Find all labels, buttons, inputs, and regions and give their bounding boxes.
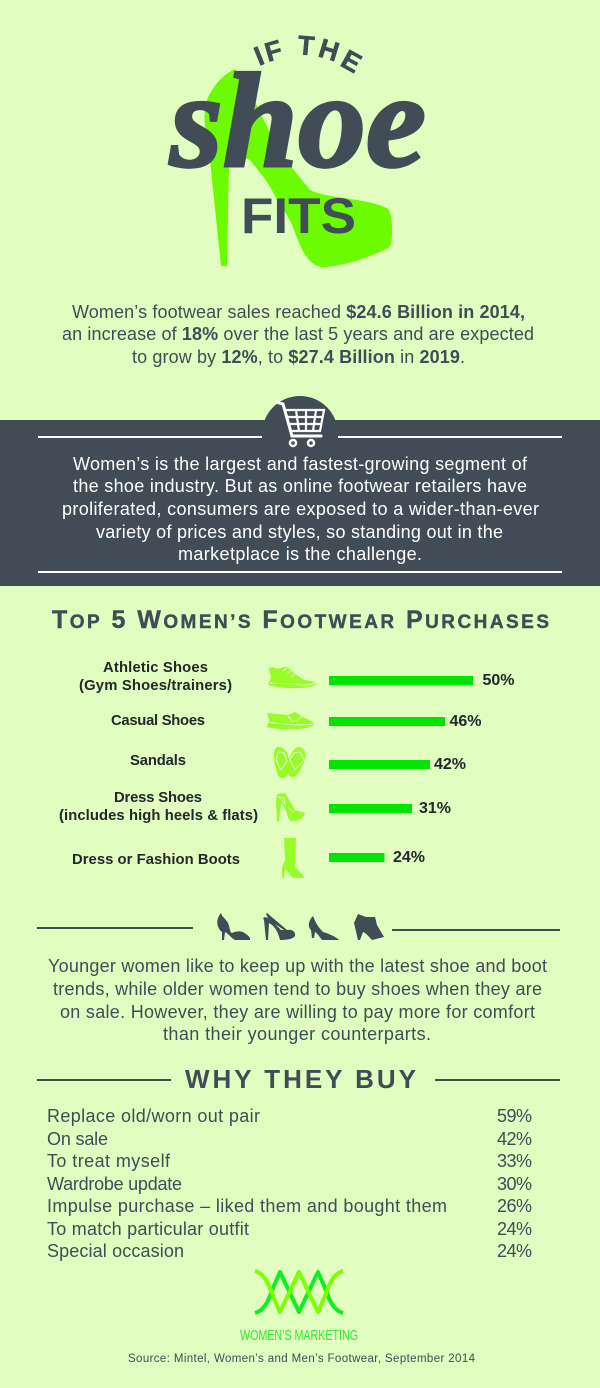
row: dress shoes: (includes high heels & flats) <box>59 808 258 824</box>
table: reasons to buy: 24% <box>497 1241 532 1261</box>
text: younger vs older women: trends, while older women tend to buy shoes when they are <box>53 979 542 999</box>
band text <box>62 454 539 564</box>
row: dress shoes: 31% <box>419 800 451 817</box>
table: reasons to buy: On sale <box>47 1129 108 1149</box>
icon: strappy high heel <box>276 793 305 821</box>
title: if the (arched): E <box>336 44 366 79</box>
intro text: an increase of 18% over the last 5 years and are expected <box>62 324 534 344</box>
text: younger vs older women: Younger women like to keep up with the latest shoe and boot <box>48 956 547 976</box>
row: athletic shoes <box>79 660 514 694</box>
icon: green high heel <box>205 69 392 267</box>
row: dress or fashion boots: Dress or Fashion Boots <box>72 852 240 868</box>
logo: women's marketing <box>240 1271 358 1344</box>
table: reasons to buy: 59% <box>497 1106 532 1126</box>
title: shoe script: shoe <box>169 47 426 196</box>
text: younger vs older women: on sale. However, they are willing to pay more for comfort <box>60 1002 535 1022</box>
table: reasons to buy: To treat myself <box>47 1151 171 1171</box>
logo: women's marketing: WOMEN’S MARKETING <box>240 1327 358 1344</box>
band text: marketplace is the challenge. <box>178 544 422 564</box>
band text: variety of prices and styles, so standing out in the <box>96 522 503 542</box>
row: casual shoes <box>111 712 482 730</box>
bar chart: top 5 purchases <box>59 660 514 878</box>
row: dress shoes <box>59 790 451 824</box>
table: reasons to buy: Wardrobe update <box>47 1174 182 1194</box>
text: younger vs older women: than their younger counterparts. <box>163 1024 431 1044</box>
icon: casual shoe <box>267 712 314 729</box>
heading: why they buy: WHY THEY BUY <box>185 1064 416 1094</box>
row: casual shoes: Casual Shoes <box>111 713 205 729</box>
icon: trainer <box>268 667 317 688</box>
table: reasons to buy: 26% <box>497 1196 532 1216</box>
title: if the (arched) <box>250 30 366 79</box>
row: dress shoes: Dress Shoes <box>114 790 202 806</box>
intro text: Women’s footwear sales reached $24.6 Billion in 2014, <box>72 302 525 322</box>
row: athletic shoes: 50% <box>482 672 514 689</box>
row: sandals: 42% <box>434 756 466 773</box>
row: athletic shoes: Athletic Shoes <box>103 660 208 676</box>
table: reasons to buy: 30% <box>497 1174 532 1194</box>
table: reasons to buy: 42% <box>497 1129 532 1149</box>
title: fits: FITS <box>241 188 356 244</box>
icon: shopping cart <box>276 402 324 446</box>
icon: flip flops <box>274 747 306 778</box>
row: sandals: Sandals <box>130 753 186 769</box>
band text: proliferated, consumers are exposed to a wider-than-ever <box>62 499 539 519</box>
source note: Source: Mintel, Women’s and Men’s Footwear, September 2014 <box>128 1353 476 1365</box>
icon row: four dark heels <box>37 913 560 940</box>
row: sandals <box>130 747 466 778</box>
table: reasons to buy: To match particular outfit <box>47 1219 249 1239</box>
table: reasons to buy: Special occasion <box>47 1241 184 1261</box>
intro text: to grow by 12%, to $27.4 Billion in 2019. <box>132 347 465 367</box>
row: dress or fashion boots <box>72 838 425 878</box>
table: reasons to buy: 33% <box>497 1151 532 1171</box>
panel: industry challenge band <box>0 396 600 586</box>
title: if the shoe fits <box>169 30 426 267</box>
heading: top 5 women's footwear purchases: TOP 5 WOMEN’S FOOTWEAR PURCHASES <box>52 606 549 634</box>
table: reasons to buy: 24% <box>497 1219 532 1239</box>
row: athletic shoes: (Gym Shoes/trainers) <box>79 678 232 694</box>
text: younger vs older women <box>48 956 547 1044</box>
table: reasons to buy <box>47 1106 532 1261</box>
table: reasons to buy: Replace old/worn out pair <box>47 1106 260 1126</box>
icon: tall boot <box>282 838 304 878</box>
title: if the (arched): T <box>296 30 316 61</box>
table: reasons to buy: Impulse purchase – liked them and bought them <box>47 1196 447 1216</box>
row: dress or fashion boots: 24% <box>393 849 425 866</box>
row: casual shoes: 46% <box>450 713 482 730</box>
intro text <box>62 302 534 367</box>
title: if the (arched): F <box>261 34 286 68</box>
title: if the (arched): H <box>315 33 343 67</box>
title: if the (arched): I <box>250 41 268 72</box>
band text: the shoe industry. But as online footwear retailers have <box>73 476 527 496</box>
band text: Women’s is the largest and fastest-growing segment of <box>73 454 528 474</box>
